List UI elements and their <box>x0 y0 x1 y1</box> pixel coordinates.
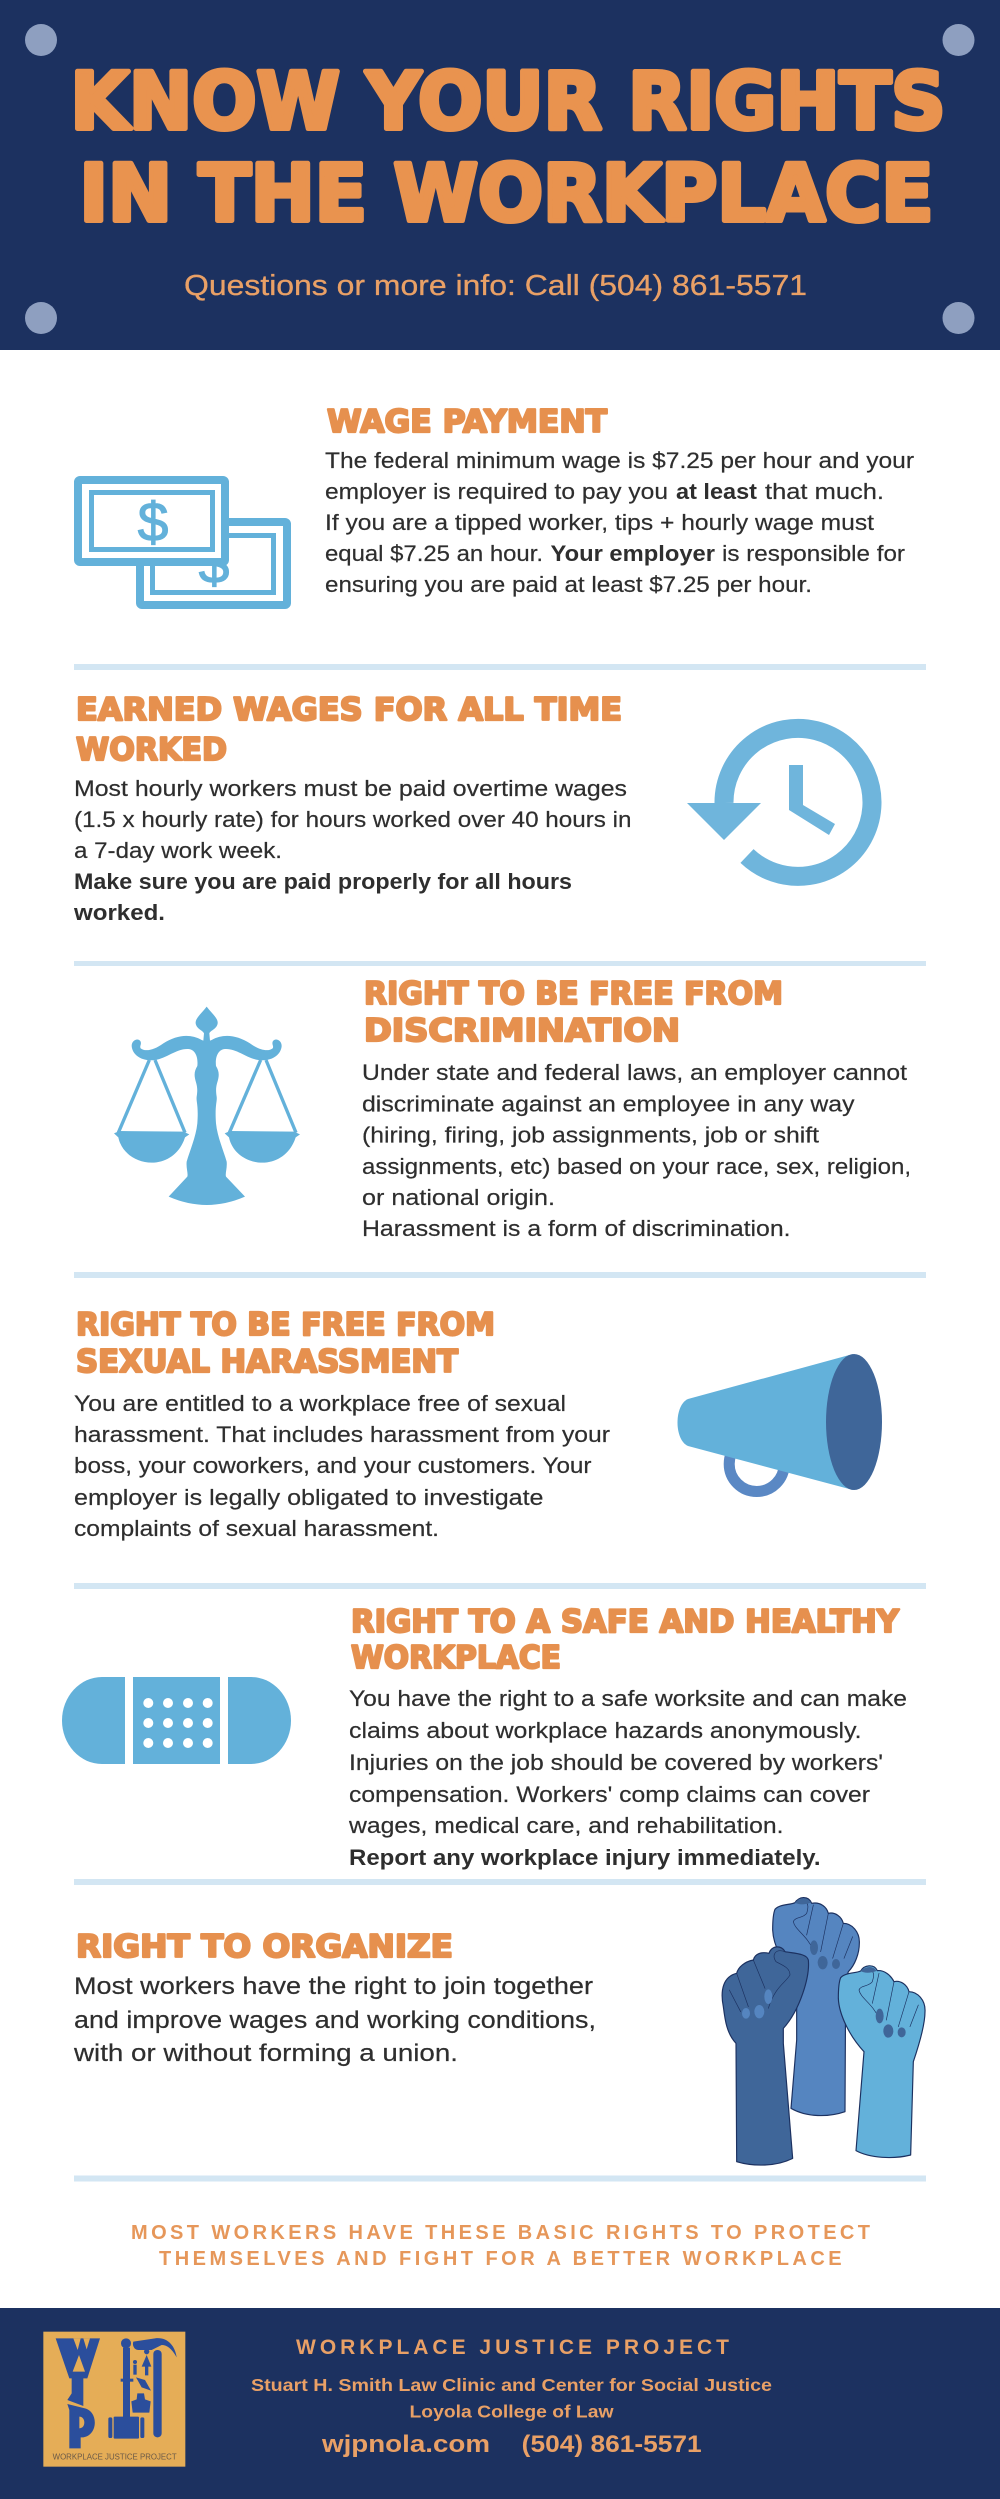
text block: discriminate against an employee in any way <box>362 1092 855 1116</box>
text block <box>74 1391 611 1541</box>
panel: discrimination <box>114 976 911 1241</box>
text block: wages, medical care, and rehabilitation. <box>348 1813 784 1838</box>
icon: WJP logo <box>43 2332 185 2467</box>
heading <box>364 976 783 1049</box>
heading <box>76 1307 495 1380</box>
text block: boss, your coworkers, and your customers. Your <box>74 1453 592 1478</box>
text block: employer is legally obligated to investigate <box>74 1485 544 1510</box>
heading: WORKED <box>76 732 227 768</box>
text: website and phone: wjpnola.com <box>321 2431 490 2458</box>
text block: You are entitled to a workplace free of sexual <box>74 1391 566 1416</box>
icon: right fist <box>838 1966 925 2158</box>
icon: dollar bills: $ <box>199 533 229 595</box>
panel: header banner <box>0 0 1000 350</box>
text block: Make sure you are paid properly for all hours <box>74 869 572 894</box>
text block: claims about workplace hazards anonymously. <box>349 1718 862 1743</box>
text block: If you are a tipped worker, tips + hourly wage must <box>325 510 875 535</box>
text block: that much. <box>765 479 884 504</box>
heading: RIGHT TO BE FREE FROM <box>364 976 783 1012</box>
text block: equal $7.25 an hour. <box>325 541 543 566</box>
text block <box>73 776 631 925</box>
text block: (hiring, firing, job assignments, job or shift <box>362 1123 820 1148</box>
subtitle: contact line: Questions or more info: Call (504) 861-5571 <box>184 270 807 302</box>
panel: footer <box>0 2308 1000 2499</box>
heading: EARNED WAGES FOR ALL TIME <box>76 692 622 728</box>
text block: Your employer <box>550 541 715 566</box>
text block: a 7-day work week. <box>74 838 282 863</box>
text block: is responsible for <box>722 541 906 566</box>
text block: Injuries on the job should be covered by workers' <box>349 1750 883 1775</box>
icon: scales of justice <box>114 1007 300 1205</box>
text: clinic and college: Stuart H. Smith Law Clinic and Center for Social Justice <box>251 2375 772 2395</box>
text: website and phone: (504) 861-5571 <box>522 2431 702 2458</box>
title <box>70 58 946 240</box>
heading: SEXUAL HARASSMENT <box>76 1344 458 1380</box>
text block <box>348 1686 907 1870</box>
icon: bandage <box>62 1677 291 1764</box>
icon: raised fists <box>722 1898 925 2165</box>
text block: harassment. That includes harassment from your <box>74 1422 611 1447</box>
text block: You have the right to a safe worksite and can make <box>349 1686 907 1711</box>
text block: assignments, etc) based on your race, sex, religion, <box>362 1154 911 1179</box>
heading <box>76 692 622 768</box>
text block: Most workers have the right to join together <box>74 1973 593 2000</box>
text: clinic and college: Loyola College of Law <box>410 2402 614 2422</box>
text block: complaints of sexual harassment. <box>74 1516 439 1541</box>
icon: dollar bills: $ <box>138 491 168 553</box>
icon: megaphone <box>678 1354 882 1492</box>
text block: employer is required to pay you <box>325 479 668 504</box>
text block: ensuring you are paid at least $7.25 per hour. <box>325 572 812 597</box>
text: clinic and college <box>251 2375 772 2422</box>
text block <box>73 1973 596 2067</box>
callout: closing statement <box>131 2222 870 2270</box>
callout: closing statement: THEMSELVES AND FIGHT FOR A BETTER WORKPLACE <box>159 2248 842 2270</box>
icon: corner dots <box>25 24 974 334</box>
text block: at least <box>676 479 758 504</box>
text block: Under state and federal laws, an employer cannot <box>362 1060 908 1085</box>
icon: WJP logo: WORKPLACE JUSTICE PROJECT <box>53 2452 177 2461</box>
text block: Harassment is a form of discrimination. <box>362 1216 790 1241</box>
text block: The federal minimum wage is $7.25 per hour and your <box>325 448 915 473</box>
panel: wage payment <box>78 404 915 605</box>
icon: clock with arrow <box>687 728 872 876</box>
icon: left fist <box>722 1947 809 2165</box>
text block: with or without forming a union. <box>73 2040 458 2067</box>
title: IN THE WORKPLACE <box>80 150 934 240</box>
heading: DISCRIMINATION <box>364 1013 680 1049</box>
text: website and phone <box>321 2431 702 2458</box>
icon: middle fist <box>773 1898 859 2116</box>
heading <box>351 1604 900 1676</box>
text block: compensation. Workers' comp claims can cover <box>349 1782 871 1807</box>
callout: closing statement: MOST WORKERS HAVE THESE BASIC RIGHTS TO PROTECT <box>131 2222 870 2244</box>
text block: or national origin. <box>362 1185 555 1210</box>
text block: worked. <box>73 900 165 925</box>
text block <box>325 448 915 597</box>
text: organization name: WORKPLACE JUSTICE PROJECT <box>296 2336 729 2359</box>
heading: RIGHT TO BE FREE FROM <box>76 1307 495 1343</box>
heading: WAGE PAYMENT <box>327 404 607 440</box>
heading: RIGHT TO ORGANIZE <box>76 1929 453 1965</box>
panel: safe and healthy workplace <box>62 1604 907 1870</box>
heading: RIGHT TO A SAFE AND HEALTHY <box>351 1604 900 1640</box>
heading: WORKPLACE <box>351 1640 561 1676</box>
panel: earned wages <box>73 692 872 925</box>
title: KNOW YOUR RIGHTS <box>70 58 946 148</box>
text block: Most hourly workers must be paid overtime wages <box>74 776 627 801</box>
text block: (1.5 x hourly rate) for hours worked over 40 hours in <box>74 807 632 832</box>
text block: Report any workplace injury immediately. <box>349 1845 820 1870</box>
icon: dollar bills <box>78 480 287 605</box>
text block: and improve wages and working conditions, <box>74 2007 596 2034</box>
text block <box>362 1060 911 1241</box>
panel: sexual harassment <box>74 1307 882 1541</box>
panel: right to organize <box>73 1898 925 2165</box>
